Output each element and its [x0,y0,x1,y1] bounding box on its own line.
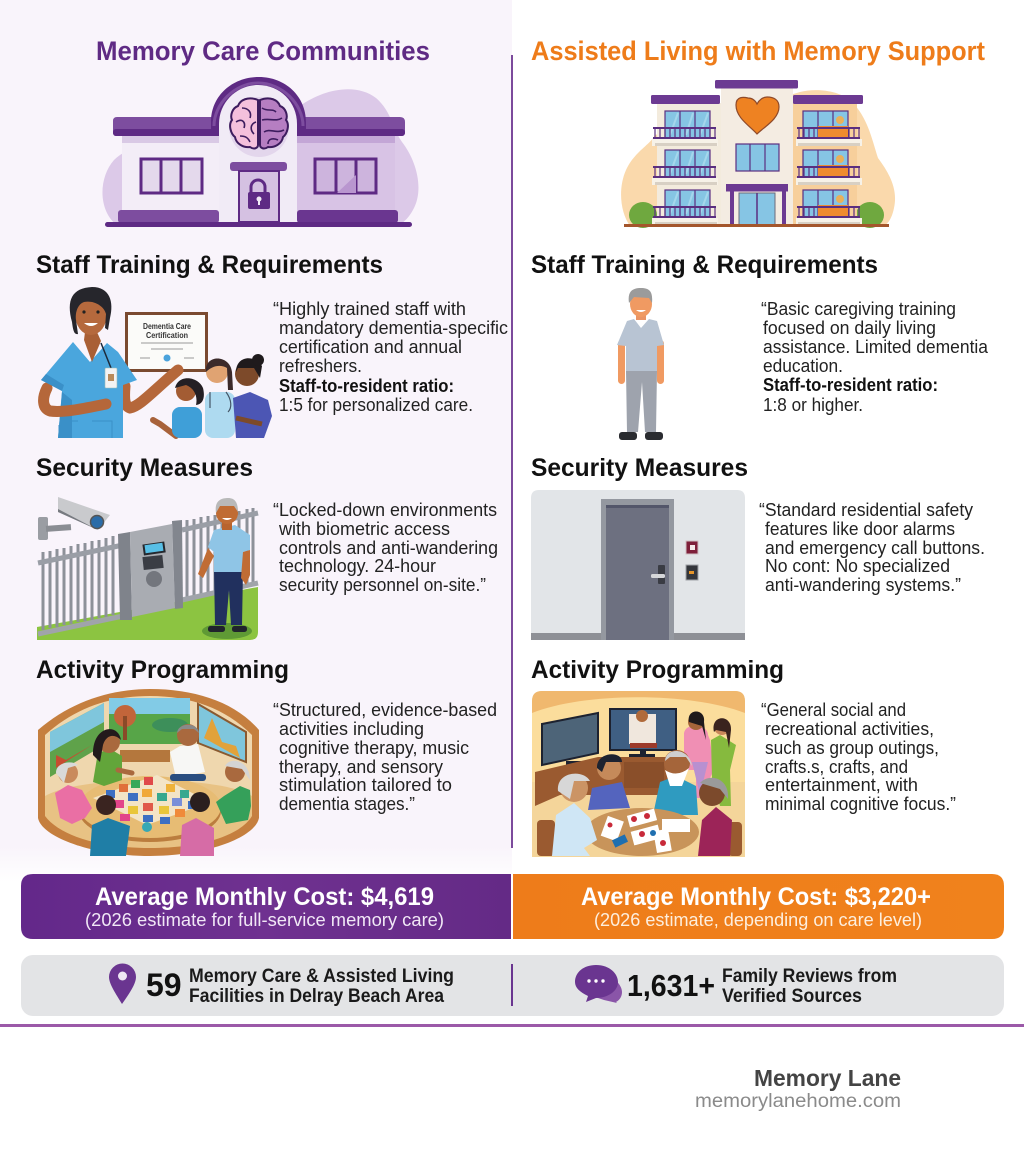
right activity text block: crafts.s, crafts, and [765,757,908,777]
left security text block: security personnel on-site.” [279,575,486,595]
right security text block: No cont: No specialized [765,556,950,576]
right staff text block: Staff-to-resident ratio: [763,375,938,395]
right staff text block [761,299,989,415]
playing cards [601,809,690,853]
footer brand: Memory Lane [754,1065,901,1091]
illustration: nurse presenting certificate [41,287,272,438]
illustration: therapy room with game table [38,689,259,856]
right heading: security: Security Measures [531,454,748,482]
left staff text block: Staff-to-resident ratio: [279,376,454,396]
left heading: staff training: Staff Training & Requirements [36,251,383,279]
footer rule [0,1024,1024,1027]
cost banner: memory care [21,874,511,939]
left activity text block [273,700,497,814]
lock icon [248,180,270,209]
stat: 59 facilities [146,966,454,1007]
left column title: Memory Care Communities [96,36,430,66]
certificate: Dementia Care [143,322,191,331]
right staff text block: focused on daily living [763,318,936,338]
security camera [38,497,110,540]
cost banner: memory care: Average Monthly Cost: $4,619 [95,883,434,911]
seated residents [55,724,251,856]
footer brand: memorylanehome.com [695,1091,901,1112]
left activity text block: cognitive therapy, music [279,738,469,758]
left staff text block: refreshers. [279,356,362,376]
right staff text block: 1:8 or higher. [763,395,863,415]
certificate [125,312,208,372]
stat: 59 facilities: Memory Care & Assisted Living [189,966,454,987]
left heading: activity: Activity Programming [36,656,289,684]
left security text block: controls and anti-wandering [279,538,498,558]
stat: 59 facilities: Facilities in Delray Beach Area [189,986,444,1007]
stat: 1,631+ reviews: Verified Sources [722,986,862,1007]
right activity text block: such as group outings, [765,738,939,758]
brain icon [229,97,289,157]
stat: 1,631+ reviews [627,966,897,1007]
left activity text block: stimulation tailored to [279,775,452,795]
television left [542,713,598,765]
icon: speech bubbles [575,965,622,1003]
illustration: residents playing cards [532,691,745,857]
illustration: standing caregiver [617,288,664,440]
footer brand [695,1065,901,1112]
right security text block: anti-wandering systems.” [765,575,961,595]
television right [610,709,676,757]
left activity text block: activities including [279,719,424,739]
stat: 59 facilities: 59 [146,967,182,1003]
right staff text block: “Basic caregiving training [761,299,956,319]
right activity text block [761,700,956,814]
left staff text block: certification and annual [279,337,462,357]
cost banner: assisted living: (2026 estimate, depending on care level) [594,910,922,930]
left activity text block: therapy, and sensory [279,757,443,777]
illustration: residential door with alarm [531,490,745,640]
right staff text block: assistance. Limited dementia [763,337,989,357]
cost banner: assisted living: Average Monthly Cost: $3,220+ [581,883,931,911]
left panel background [0,0,512,882]
right column title: Assisted Living with Memory Support [531,36,985,66]
heart icon [736,97,779,134]
door alarm [686,541,698,554]
centre divider [511,55,513,848]
illustration: secure gate with camera and guard [37,497,258,640]
right heading: activity: Activity Programming [531,656,784,684]
right activity text block: entertainment, with [765,775,918,795]
right staff text block: education. [763,356,843,376]
right activity text block: recreational activities, [765,719,934,739]
right security text block [759,500,985,595]
left security text block: technology. 24-hour [279,556,436,576]
left activity text block: “Structured, evidence-based [273,700,497,720]
right security text block: and emergency call buttons. [765,538,985,558]
left security text block: with biometric access [278,519,450,539]
left security text block: “Locked-down environments [273,500,497,520]
game cards on table [93,775,210,832]
left activity text block: dementia stages.” [279,794,415,814]
illustration: memory care building [102,77,418,227]
certificate: Certification [146,331,188,340]
statistics bar [21,955,1004,1016]
left staff text block [273,299,508,415]
left staff text block: 1:5 for personalized care. [279,395,473,415]
right security text block: “Standard residential safety [759,500,973,520]
cost banner: memory care: (2026 estimate for full-service memory care) [85,910,444,930]
icon: location pin [109,964,136,1004]
right activity text block: “General social and [761,700,906,720]
call button [686,565,698,580]
stat: 1,631+ reviews: Family Reviews from [722,966,897,987]
right security text block: features like door alarms [765,519,955,539]
cost banner: assisted living [513,874,1004,939]
left security text block [273,500,498,595]
right activity text block: minimal cognitive focus.” [765,794,956,814]
stat: 1,631+ reviews: 1,631+ [627,968,715,1003]
illustration: assisted living apartment building [621,80,895,228]
left heading: security: Security Measures [36,454,253,482]
right heading: staff training: Staff Training & Requirements [531,251,878,279]
left staff text block: “Highly trained staff with [273,299,466,319]
left staff text block: mandatory dementia-specific [279,318,508,338]
